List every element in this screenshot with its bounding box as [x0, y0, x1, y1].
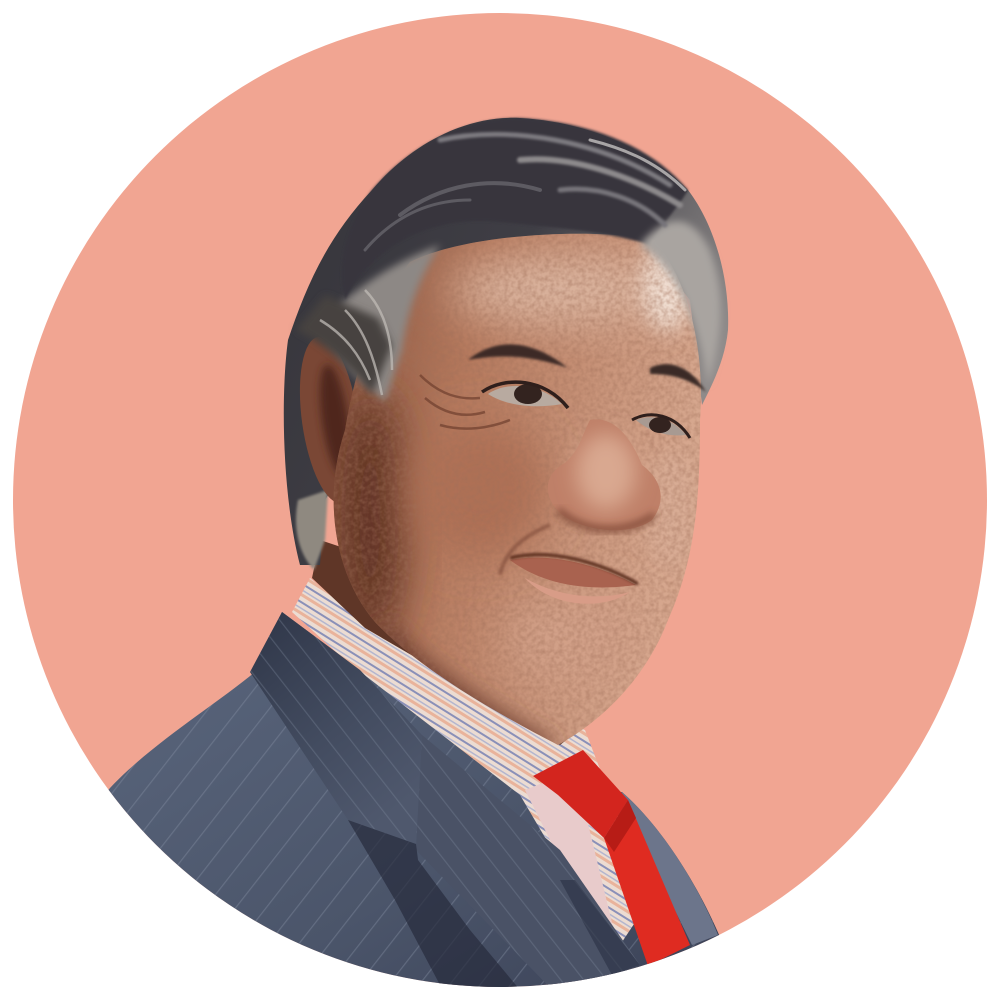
right eye: [632, 415, 690, 438]
grey sideburn lock: [296, 490, 328, 570]
mouth: [510, 555, 638, 604]
smile line: [500, 525, 550, 575]
face: [320, 225, 710, 760]
eye wrinkles: [420, 375, 510, 429]
under jaw shade: [382, 622, 564, 745]
jacket lapels: [250, 612, 640, 998]
lower face light: [504, 602, 580, 674]
left face shadow: [334, 390, 406, 650]
figure clipped to circle: [100, 118, 728, 1000]
shirt and collar: [292, 578, 650, 945]
right shoulder: [618, 792, 718, 945]
top hair volume: [342, 118, 721, 385]
right cheek: [656, 465, 674, 526]
nose: [548, 419, 661, 530]
suit jacket: [100, 612, 720, 1000]
ear: [300, 338, 353, 502]
grey temple hair: [296, 245, 440, 402]
right eyebrow: [650, 364, 706, 392]
neck shadow: [312, 540, 585, 745]
shirt-side jacket shadow: [560, 880, 640, 975]
cheek tone: [410, 420, 550, 560]
forehead highlight: [450, 256, 670, 324]
left eye: [482, 382, 568, 408]
hair back: [284, 118, 728, 570]
tie: [533, 750, 690, 966]
hair strands: [365, 134, 685, 250]
skin texture: [320, 225, 710, 755]
left eyebrow: [468, 344, 568, 368]
lapel notch shadow: [348, 820, 520, 990]
